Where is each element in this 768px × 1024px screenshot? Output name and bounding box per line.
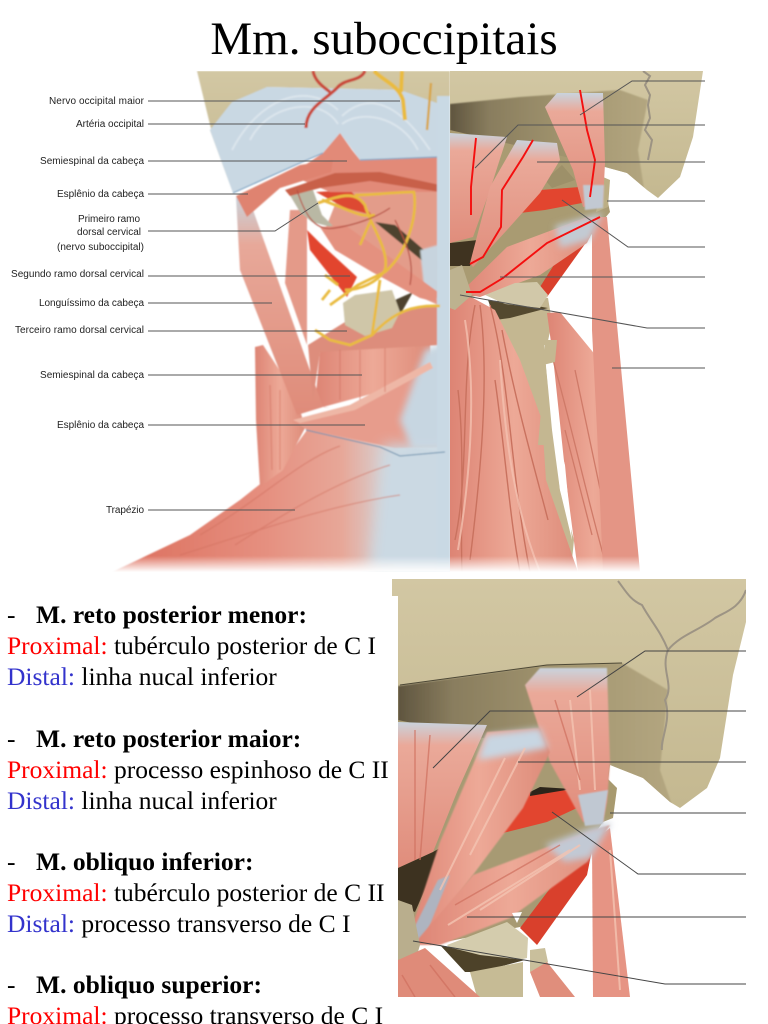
lower cut line: [306, 430, 445, 456]
skull sutures: [618, 581, 746, 750]
anatomical labels: dorsal cervical: [77, 227, 141, 238]
lower left muscle mass: [450, 290, 578, 572]
minor left muscle: [450, 133, 507, 243]
ledge line: [400, 663, 622, 685]
central strip: [436, 95, 450, 452]
text: M. reto posterior maior: M. reto posterior maior:: [36, 724, 301, 753]
obliquus capitis inferior: [413, 825, 610, 945]
deep muscle base: [325, 190, 438, 305]
anatomical labels: Primeiro ramo: [78, 214, 140, 225]
backdrop behind deep muscles: [398, 720, 610, 945]
small nerve: [427, 83, 431, 130]
title: Mm. suboccipitais: [210, 13, 558, 65]
splenius lower: [299, 382, 418, 448]
anatomical labels: Nervo occipital maior: [49, 96, 145, 107]
white gap: [512, 912, 522, 923]
rectus minor tendon bottom: [578, 790, 608, 826]
C2 bone: [343, 290, 400, 336]
deep space muscle: [307, 306, 438, 386]
bottom fade: [450, 556, 710, 572]
C1 transverse process: [603, 778, 617, 822]
occipital artery: [306, 71, 365, 128]
suboccipital and cervical nerves: [315, 192, 440, 345]
text: M. obliquo inferior: [7, 847, 384, 938]
anatomical labels: Esplênio da cabeça: [57, 420, 144, 431]
bone knob: [530, 948, 548, 972]
rectus major tendon: [478, 728, 548, 760]
text: M. obliquo superior: M. obliquo superior:: [36, 970, 262, 999]
text: M. obliquo inferior: M. obliquo inferior:: [36, 847, 253, 876]
spinous process: [398, 900, 420, 962]
lower artery: [520, 845, 593, 945]
muscle fibres: [223, 348, 400, 544]
splenius band right: [285, 172, 440, 196]
anatomical labels: Artéria occipital: [76, 119, 144, 130]
lower vertebra: [470, 962, 523, 997]
vertebral column: [497, 290, 574, 572]
text: M. reto posterior maior: [7, 724, 389, 815]
vertebra processes: [538, 340, 557, 445]
vertebral artery: [307, 230, 357, 297]
dark gap over artery: [530, 787, 572, 796]
artery top: [316, 190, 372, 215]
aponeurosis: [210, 87, 438, 193]
upper artery: [497, 790, 577, 833]
lower artery: [540, 227, 590, 297]
skull bone, right: [450, 71, 703, 198]
backdrop behind deep muscles: [450, 130, 610, 297]
white gaps between muscles: [544, 345, 572, 540]
figure: neck dissection, right side: [450, 71, 710, 572]
figure: suboccipital close-up: [392, 579, 746, 997]
upper artery: [520, 187, 582, 213]
skull bone, left: [196, 71, 450, 129]
fine red vessels: [297, 190, 411, 285]
dark recess: [450, 240, 478, 266]
text: M. reto posterior menor: -: [7, 600, 16, 629]
obliquus inferior: [460, 217, 600, 297]
lower skull shadow: [450, 90, 648, 195]
dark recess, C2: [488, 300, 548, 320]
rectus capitis posterior major: [407, 728, 550, 942]
muscle fibres: [440, 690, 620, 990]
text: M. obliquo inferior: Distal: processo transverso de C I: [7, 909, 350, 938]
semispinalis top: [290, 133, 438, 192]
obliquus inferior: [320, 225, 438, 302]
text: M. reto posterior menor: [7, 600, 376, 691]
cut deep muscle, left: [255, 345, 305, 487]
text: M. obliquo superior: -: [7, 970, 16, 999]
semispinalis lower: [315, 343, 431, 408]
anatomical labels: Longuíssimo da cabeça: [39, 298, 144, 309]
strap muscle: [592, 828, 630, 997]
anatomical labels: Esplênio da cabeça: [57, 189, 144, 200]
skull bone: [392, 579, 746, 808]
lower cut edge: [293, 362, 433, 423]
dark recess left: [398, 845, 445, 912]
text: M. obliquo superior: [7, 970, 383, 1024]
red hand-drawn outlines: [466, 90, 600, 292]
second lateral muscle: [547, 312, 640, 572]
text: M. reto posterior menor: Distal: linha nucal inferior: [7, 662, 277, 691]
obliquus tendon: [555, 212, 603, 248]
rectus capitis posterior minor: [525, 668, 610, 822]
bottom fade: [100, 556, 450, 572]
C1 transverse bone: [596, 177, 610, 212]
spinous process bone: [450, 265, 472, 310]
C2 bone: [485, 282, 548, 308]
lower tendon: [407, 875, 450, 942]
bone shadow beneath ledge: [398, 663, 672, 805]
lower blue strip: [370, 445, 450, 572]
text: M. reto posterior menor: M. reto posterior menor:: [36, 600, 307, 629]
longissimus capitis: [236, 197, 323, 415]
anatomical labels: Semiespinal da cabeça: [40, 156, 144, 167]
rectus minor tendon: [583, 185, 604, 210]
anatomical labels: Semiespinal da cabeça: [40, 370, 144, 381]
trapezius: [112, 430, 450, 572]
text: M. reto posterior maior: Proximal: processo espinhoso de C II: [7, 755, 389, 784]
rectus major: [470, 140, 560, 267]
vertical muscle behind: [285, 210, 307, 345]
left muscle: [398, 722, 487, 868]
skull suture: [643, 71, 652, 160]
rectus minor: [545, 93, 605, 207]
figure: neck dissection, left side: [100, 71, 450, 572]
dark recess beneath C2: [440, 945, 525, 972]
splenius fade: [400, 340, 450, 450]
longissimus, right: [592, 217, 640, 572]
blue tendon deep: [420, 245, 438, 300]
bone between muscles: [545, 165, 575, 188]
deep dark streaks: [375, 221, 424, 312]
anatomical labels: Segundo ramo dorsal cervical: [11, 269, 144, 280]
text: M. reto posterior menor: Proximal: tubérculo posterior de C I: [7, 631, 376, 660]
text: M. obliquo inferior: -: [7, 847, 16, 876]
leader lines, close-up: [413, 651, 746, 984]
aponeurosis edge: [233, 153, 438, 193]
anatomical labels: [11, 96, 145, 516]
anatomical labels: Terceiro ramo dorsal cervical: [15, 325, 144, 336]
anatomical labels: (nervo suboccipital): [57, 242, 144, 253]
aponeurosis fibres: [232, 96, 430, 150]
text: M. reto posterior maior: Distal: linha nucal inferior: [7, 786, 277, 815]
grey tendon near atlas: [290, 190, 332, 227]
lateral muscle fibres: [553, 360, 615, 572]
obliquus tendon: [545, 822, 612, 862]
splenius band left: [236, 163, 309, 218]
leader lines, top figure: [148, 81, 705, 510]
C2 bone: [447, 922, 528, 972]
greater occipital nerve: [374, 71, 405, 120]
text: M. obliquo inferior: Proximal: tubérculo posterior de C II: [7, 878, 384, 907]
muscle lower left: [398, 948, 480, 997]
mid back muscle fibres: [455, 305, 548, 572]
anatomical labels: Trapézio: [106, 505, 144, 516]
muscle lower right: [530, 962, 575, 997]
text: M. reto posterior maior: -: [7, 724, 16, 753]
